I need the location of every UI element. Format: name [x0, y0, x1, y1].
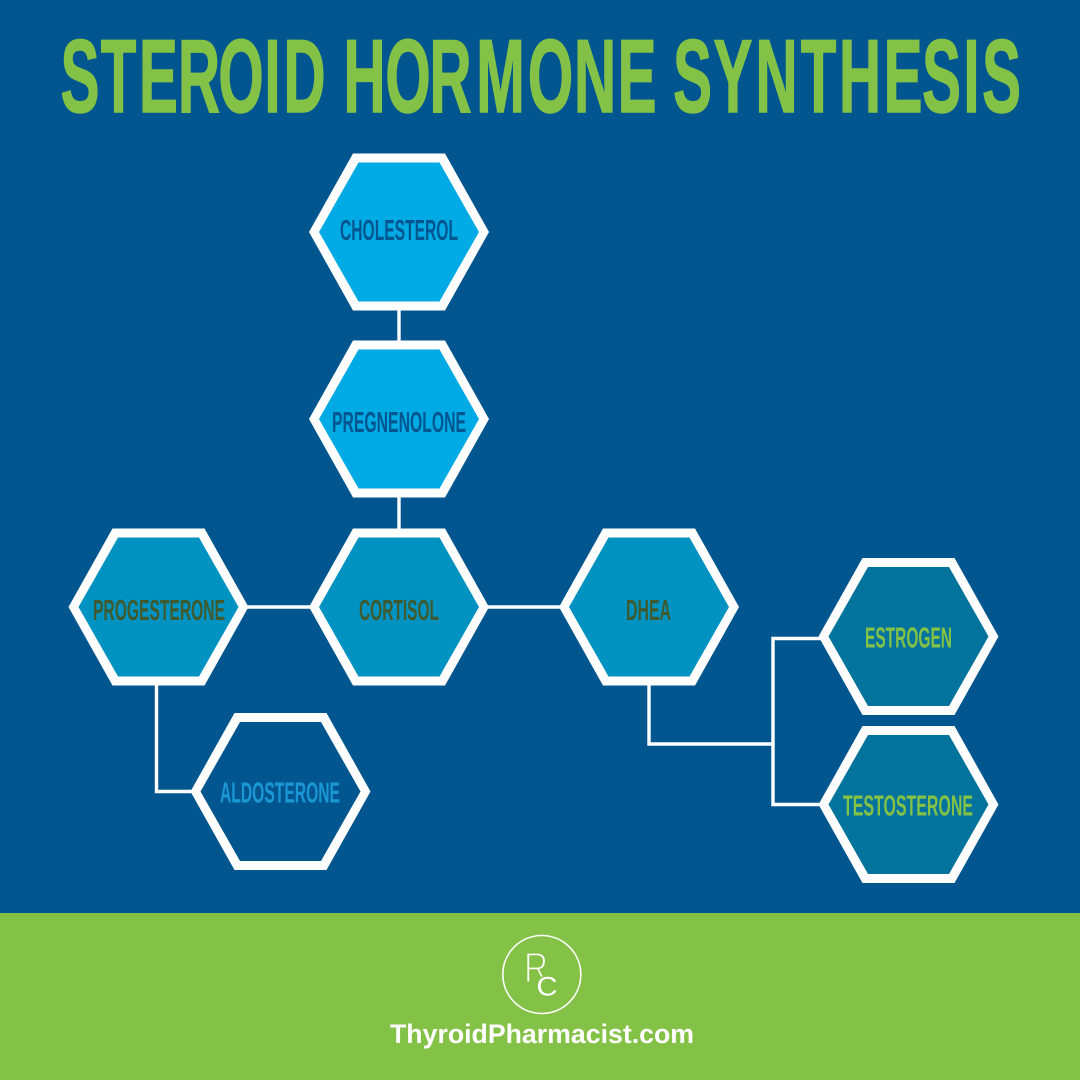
footer band: [0, 913, 1080, 1080]
hexagon: progesterone: PROGESTERONE: [93, 595, 225, 627]
hexagon: estrogen: [818, 558, 998, 715]
hexagon: aldosterone: ALDOSTERONE: [220, 778, 340, 810]
hexagon: progesterone: [68, 528, 248, 686]
logo: RC monogram: R: [524, 944, 548, 992]
logo: RC monogram: [503, 936, 581, 1014]
hexagon: pregnenolone: [309, 340, 489, 498]
hexagon: pregnenolone: PREGNENOLONE: [332, 407, 466, 439]
website url: ThyroidPharmacist.com: [390, 1019, 694, 1049]
hexagon: cholesterol: [309, 154, 489, 310]
hexagon: testosterone: TESTOSTERONE: [843, 790, 973, 822]
hexagon: estrogen: ESTROGEN: [865, 622, 952, 654]
hexagon: aldosterone: [190, 713, 370, 870]
connectors: [156, 305, 825, 804]
hexagon: dhea: [559, 528, 739, 686]
hexagon: cortisol: [309, 528, 489, 686]
hexagon: cortisol: CORTISOL: [359, 595, 439, 627]
hexagon: dhea: DHEA: [626, 595, 671, 627]
title: STEROID HORMONE SYNTHESIS: [61, 18, 1021, 134]
hexagon: testosterone: [818, 726, 998, 883]
logo: RC monogram: C: [536, 972, 558, 1002]
hexagon: cholesterol: CHOLESTEROL: [340, 215, 458, 247]
